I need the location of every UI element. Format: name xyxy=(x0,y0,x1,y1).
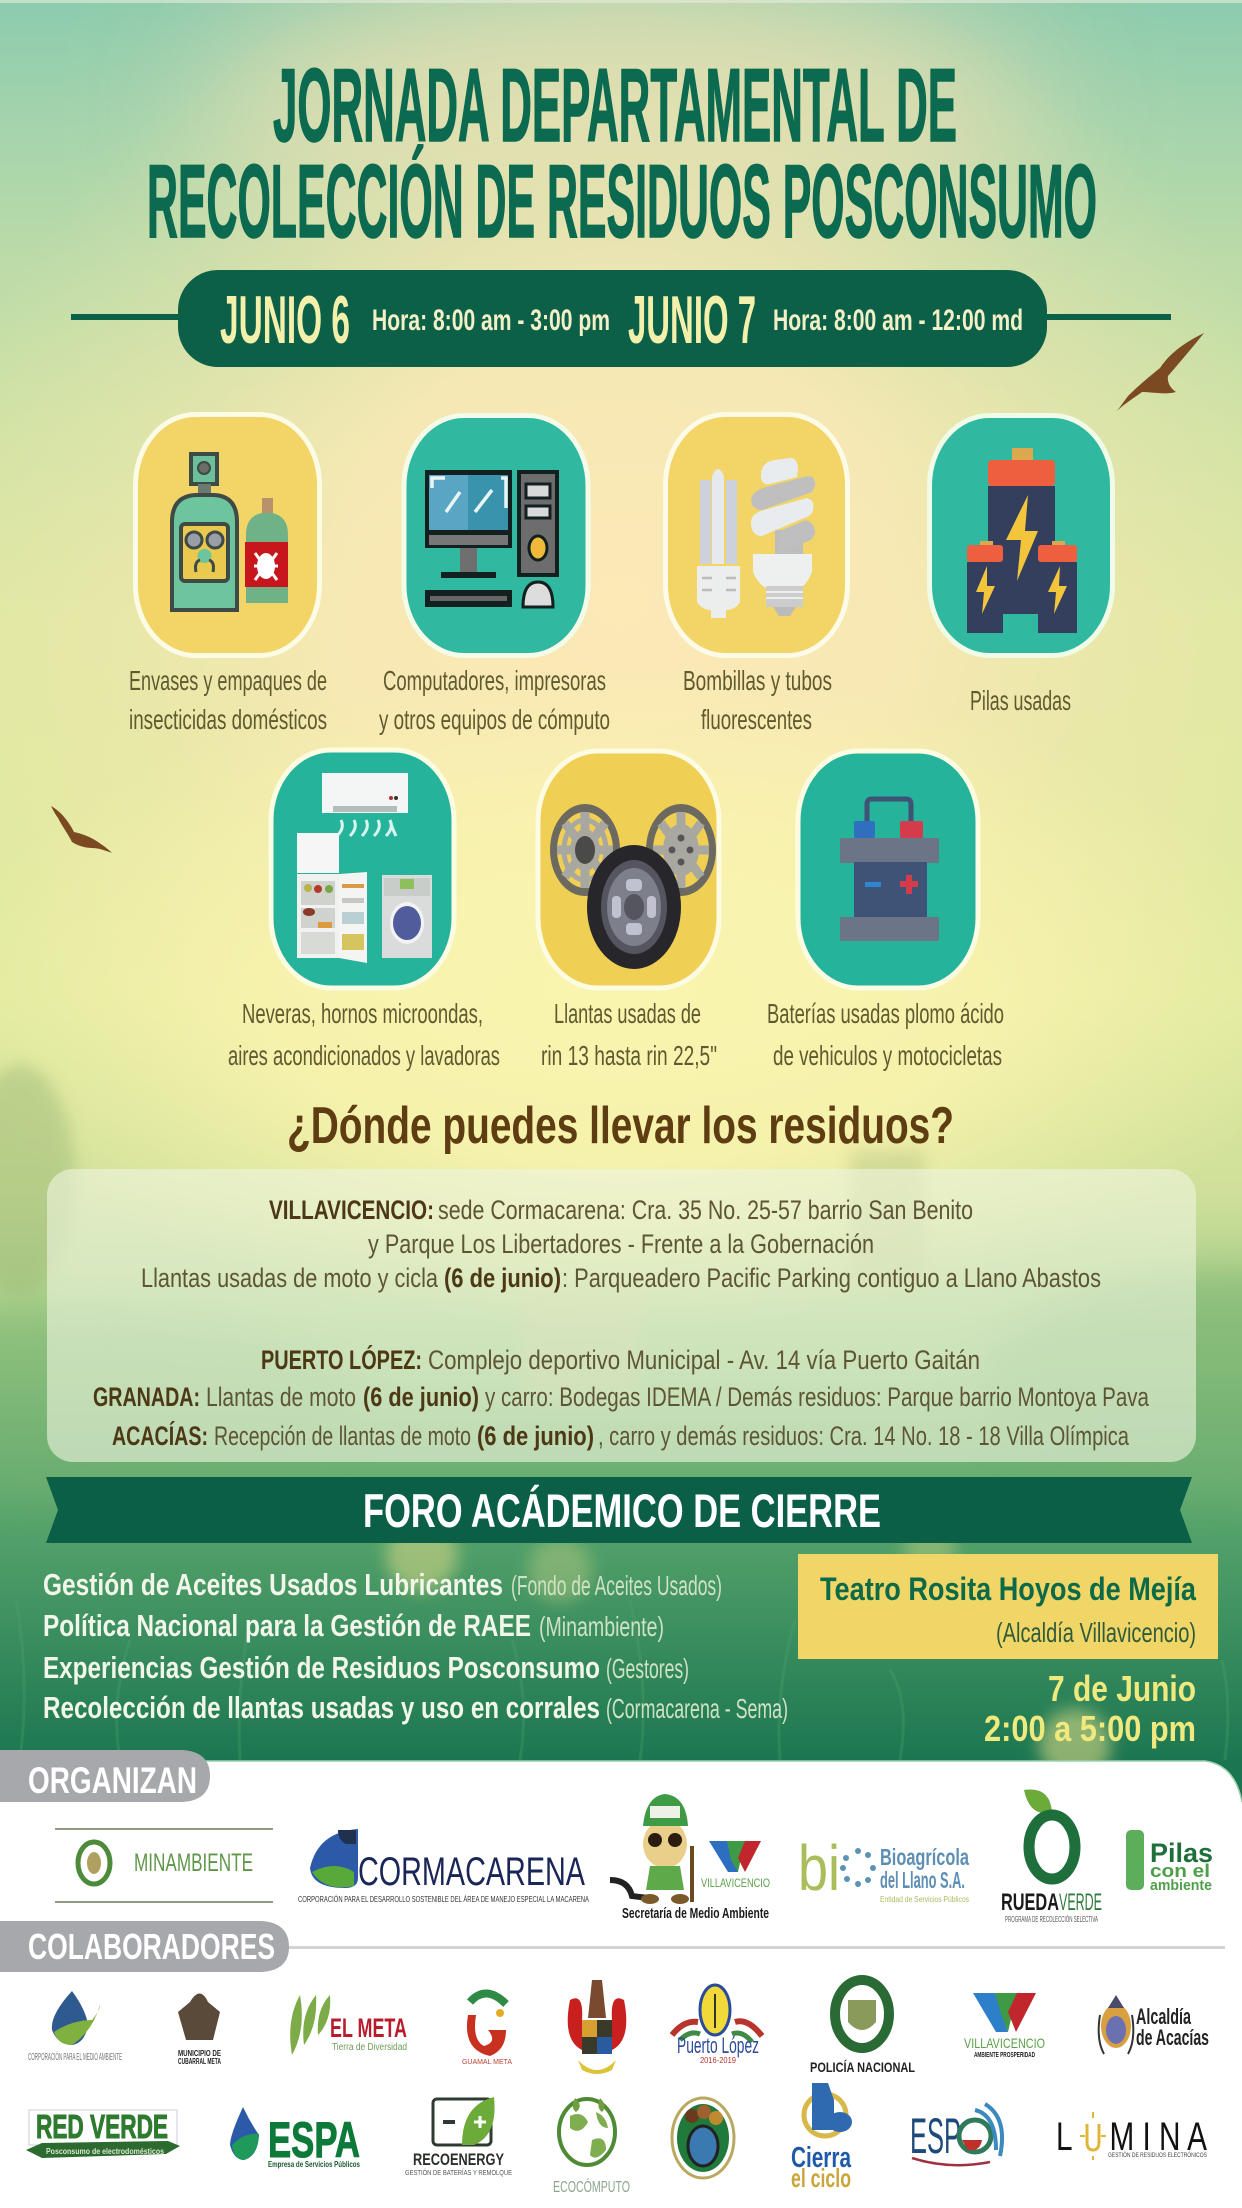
logo: bioagricola xyxy=(798,1832,969,1904)
logo: el meta: Tierra de Diversidad xyxy=(332,2042,407,2053)
logo: pilas con el ambiente: ambiente xyxy=(1150,1877,1212,1894)
logo: puerto lopez: 2016-2019 xyxy=(700,2056,737,2065)
label: colaboradores: COLABORADORES xyxy=(28,1926,275,1967)
location: granada xyxy=(93,1382,1150,1412)
location: puerto lopez xyxy=(261,1344,980,1375)
foro date and time: 7 de Junio xyxy=(1048,1668,1196,1709)
caption: pilas: Pilas usadas xyxy=(970,685,1071,716)
caption: neveras xyxy=(228,998,500,1071)
panel: locations xyxy=(47,1169,1196,1462)
icon: batteries xyxy=(967,448,1077,633)
logo: secretaria medio ambiente: Secretaría de Medio Ambiente xyxy=(622,1905,769,1922)
banner: foro academico xyxy=(46,1477,1192,1543)
foro topics list: Gestión de Aceites Usados Lubricantes xyxy=(43,1567,503,1602)
location: villavicencio xyxy=(141,1195,1101,1293)
logo: policia nacional: POLICÍA NACIONAL xyxy=(810,2059,915,2075)
logo: escudo xyxy=(178,1994,222,2066)
logo: g emblem: GUAMAL META xyxy=(462,2059,512,2066)
caption: bombillas xyxy=(683,665,832,735)
logo: bioagricola: del Llano S.A. xyxy=(880,1867,965,1893)
logo: espa: Empresa de Servicios Públicos xyxy=(268,2160,360,2169)
logo: alcaldia de acacias xyxy=(1099,1995,1209,2054)
logo: alcaldia de acacias: Alcaldía xyxy=(1136,2004,1191,2029)
location: villavicencio: VILLAVICENCIO: xyxy=(269,1195,434,1225)
logo: secretaria medio ambiente xyxy=(610,1794,770,1922)
location: acacias xyxy=(112,1420,1130,1451)
caption: llantas: Llantas usadas de xyxy=(554,998,701,1029)
logo: rueda verde: RUEDA xyxy=(1001,1889,1059,1916)
caption: llantas xyxy=(541,998,717,1071)
caption: computadores: y otros equipos de cómputo xyxy=(379,704,610,735)
logo: villavicencio: AMBIENTE PROSPERIDAD xyxy=(974,2052,1035,2059)
logo: recoenergy xyxy=(405,2097,512,2177)
logo: red verde: Posconsumo de electrodomésticos xyxy=(46,2147,164,2156)
logo: cierra el ciclo: el ciclo xyxy=(791,2163,851,2193)
location: villavicencio: y Parque Los Libertadores - Frente a la Gobernación xyxy=(368,1229,874,1259)
logo: villavicencio xyxy=(964,1993,1045,2059)
logo: policia nacional xyxy=(810,1980,915,2075)
label: colaboradores xyxy=(0,1921,1225,1972)
logo: puerto lopez: Puerto López xyxy=(677,2033,759,2058)
icon: bulbs xyxy=(697,458,815,618)
logo: espa: ESPA xyxy=(268,2112,360,2168)
logo: cormacarena: CORPORACIÓN PARA EL DESARROLLO SOSTENIBLE DEL ÁREA DE MANEJO ESPECIAL LA MACARENA xyxy=(298,1895,589,1904)
location: granada: Llantas de moto xyxy=(206,1382,356,1412)
logo: villavicencio: VILLAVICENCIO xyxy=(964,2035,1045,2051)
logo: rueda verde: VERDE xyxy=(1059,1889,1102,1916)
location: acacias: (6 de junio) xyxy=(477,1421,594,1451)
caption: neveras: aires acondicionados y lavadoras xyxy=(228,1040,500,1071)
caption: computadores: Computadores, impresoras xyxy=(383,665,606,696)
item tile: baterias xyxy=(798,751,978,988)
bird left xyxy=(51,806,112,853)
caption: insecticidas: Envases y empaques de xyxy=(129,665,327,696)
foro topics list: (Minambiente) xyxy=(539,1611,664,1642)
location: villavicencio: (6 de junio) xyxy=(444,1263,561,1293)
logo: coat of arms xyxy=(568,1980,626,2074)
title xyxy=(147,48,1097,260)
foro date and time xyxy=(984,1668,1196,1749)
date banner: JUNIO 7 xyxy=(628,282,756,358)
logo: ecocomputo xyxy=(553,2098,630,2196)
date banner: JUNIO 6 xyxy=(220,282,350,358)
location: villavicencio: : Parqueadero Pacific Parking contiguo a Llano Abastos xyxy=(562,1263,1101,1293)
foro topics list: (Fondo de Aceites Usados) xyxy=(511,1570,722,1601)
caption: llantas: rin 13 hasta rin 22,5" xyxy=(541,1040,717,1071)
logo: drop emblem xyxy=(28,1991,122,2063)
logo: red verde xyxy=(26,2108,180,2158)
logo: minambiente xyxy=(55,1828,273,1903)
logo: espa xyxy=(230,2107,360,2169)
label: organizan: ORGANIZAN xyxy=(28,1760,197,1801)
icon: tires xyxy=(550,804,716,969)
logo: puerto lopez xyxy=(672,1985,762,2065)
logo: g emblem xyxy=(462,1993,512,2066)
logo: rueda verde: PROGRAMA DE RECOLECCIÓN SELECTIVA xyxy=(1005,1915,1098,1924)
foro topics list: Política Nacional para la Gestión de RAEE xyxy=(43,1608,531,1643)
icon: appliances xyxy=(297,773,432,963)
foro topics list: Recolección de llantas usadas y uso en corrales xyxy=(43,1690,600,1725)
location: villavicencio: Llantas usadas de moto y cicla xyxy=(141,1263,439,1293)
logo: pilas con el ambiente: con el xyxy=(1150,1861,1210,1881)
caption: computadores xyxy=(379,665,610,735)
location: acacias: Recepción de llantas de moto xyxy=(214,1421,471,1451)
logo: escudo: CUBARRAL META xyxy=(178,2057,221,2066)
caption: baterias: de vehiculos y motocicletas xyxy=(773,1040,1002,1071)
location: puerto lopez: PUERTO LÓPEZ: xyxy=(261,1344,422,1375)
caption: bombillas: Bombillas y tubos xyxy=(683,665,832,696)
logo: cierra el ciclo: Cierra xyxy=(791,2142,852,2174)
foro topics list xyxy=(43,1567,788,1725)
logo: bioagricola: Entidad de Servicios Públicos xyxy=(880,1895,969,1904)
logo: recoenergy: RECOENERGY xyxy=(413,2150,504,2169)
junio 6 hours: Hora: 8:00 am - 3:00 pm xyxy=(372,304,610,337)
logo: cierra el ciclo xyxy=(791,2083,852,2193)
caption: insecticidas xyxy=(129,665,327,735)
logo: circular emblem xyxy=(672,2098,734,2178)
text: CORPORACIÓN PARA EL MEDIO AMBIENTE xyxy=(28,2050,122,2063)
caption: insecticidas: insecticidas domésticos xyxy=(129,704,327,735)
item tile: neveras xyxy=(271,750,454,988)
logo: el meta xyxy=(290,1995,407,2055)
logo: escudo: MUNICIPIO DE xyxy=(178,2049,222,2058)
logo: bioagricola: Bioagrícola xyxy=(880,1844,969,1870)
logo: pilas con el ambiente xyxy=(1126,1830,1213,1894)
junio 7 hours: Hora: 8:00 am - 12:00 md xyxy=(773,304,1023,337)
caption: bombillas: fluorescentes xyxy=(701,704,812,735)
icon: insecticide bottles xyxy=(172,454,288,610)
caption: baterias xyxy=(767,998,1004,1071)
logo: ecocomputo: ECOCÓMPUTO xyxy=(553,2177,630,2196)
logo: red verde: RED VERDE xyxy=(36,2108,168,2145)
foro topics list: (Cormacarena - Sema) xyxy=(606,1693,788,1724)
logo: recoenergy: GESTIÓN DE BATERÍAS Y REMOLQUE xyxy=(405,2168,512,2177)
logo: cormacarena xyxy=(298,1829,589,1904)
logo: el meta: EL META xyxy=(330,2013,407,2043)
bird top right xyxy=(1117,333,1204,411)
logo: secretaria medio ambiente: VILLAVICENCIO xyxy=(701,1876,770,1890)
date banner xyxy=(71,270,1171,367)
foro topics list: Experiencias Gestión de Residuos Posconsumo xyxy=(43,1650,600,1685)
label: organizan xyxy=(0,1750,210,1802)
item tile: insecticidas xyxy=(136,414,320,656)
logo: bioagricola: bi xyxy=(798,1832,840,1904)
item tile: computadores xyxy=(404,416,588,656)
logo: cormacarena: CORMACARENA xyxy=(358,1850,585,1894)
foro topics list: (Gestores) xyxy=(606,1653,689,1684)
logo: pilas con el ambiente: Pilas xyxy=(1150,1838,1213,1868)
logo: rueda verde xyxy=(1001,1789,1102,1924)
caption: baterias: Baterías usadas plomo ácido xyxy=(767,998,1004,1029)
location: puerto lopez: Complejo deportivo Municipal - Av. 14 vía Puerto Gaitán xyxy=(428,1345,980,1375)
item tile: bombillas xyxy=(666,414,848,656)
logo: espg: ESP xyxy=(910,2108,961,2164)
location: acacias: ACACÍAS: xyxy=(112,1420,208,1451)
heading: donde llevar: ¿Dónde puedes llevar los residuos? xyxy=(287,1097,954,1155)
logo: minambiente: MINAMBIENTE xyxy=(134,1849,253,1877)
banner: foro academico: FORO ACÁDEMICO DE CIERRE xyxy=(363,1484,881,1537)
item tile: pilas xyxy=(930,416,1112,656)
location: granada: (6 de junio) xyxy=(363,1382,479,1412)
venue box xyxy=(798,1554,1218,1659)
caption: neveras: Neveras, hornos microondas, xyxy=(242,998,483,1029)
icon: computer xyxy=(425,470,559,607)
location: granada: GRANADA: xyxy=(93,1382,200,1412)
white logos panel xyxy=(0,1761,1242,2208)
icon: car battery xyxy=(840,799,939,941)
location: villavicencio: sede Cormacarena: Cra. 35 No. 25-57 barrio San Benito xyxy=(438,1195,973,1225)
item tile: llantas xyxy=(538,751,719,988)
foro date and time: 2:00 a 5:00 pm xyxy=(984,1708,1196,1749)
logo: lumina: GESTIÓN DE RESIDUOS ELECTRÓNICOS xyxy=(1108,2152,1207,2159)
